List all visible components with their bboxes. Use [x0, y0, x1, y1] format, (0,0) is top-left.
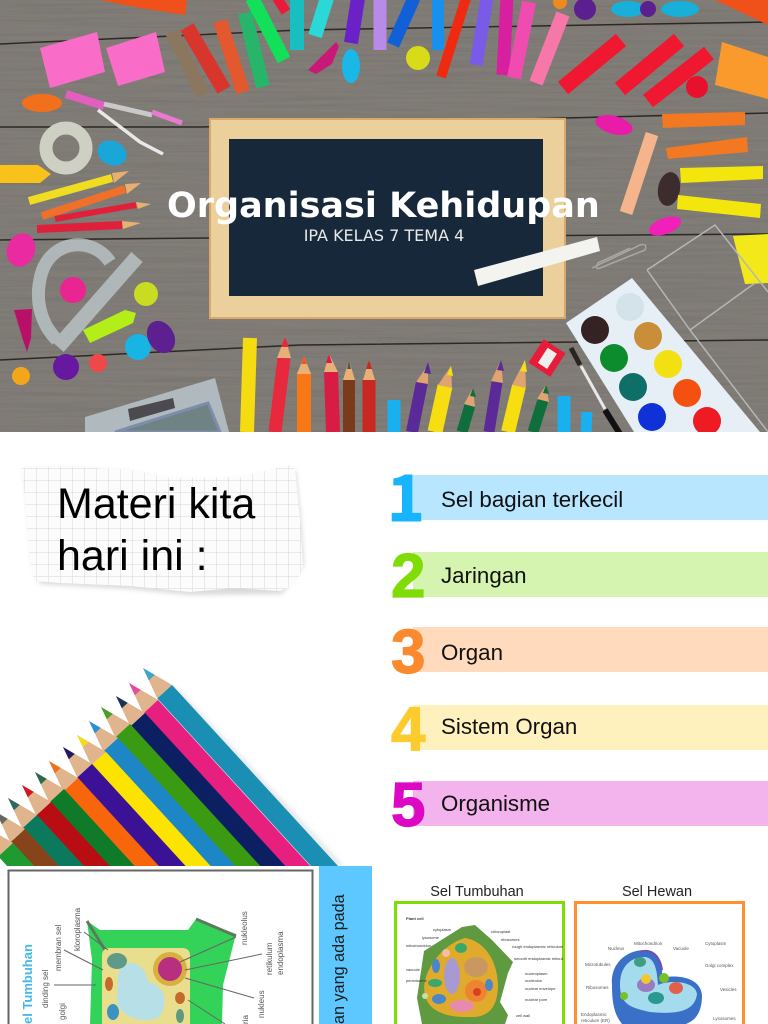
list item 2: Jaringan: [441, 563, 527, 588]
slide subtitle: IPA KELAS 7 TEMA 4: [304, 226, 464, 245]
white chalk stick: [474, 237, 600, 286]
heading: materi kita: hari ini :: [57, 532, 208, 580]
blue egg bead: [98, 140, 126, 166]
tiny labels: smooth endoplasmic reticulum: [514, 956, 569, 961]
vacuole: [117, 963, 165, 1020]
tiny labels: nuclear pore: [525, 997, 548, 1002]
green cell wall: [87, 919, 236, 1024]
pencil shadow: [175, 690, 340, 866]
top supplies: chalk row: [100, 0, 709, 101]
list item 5: 5: [391, 771, 425, 840]
list item 1: Sel bagian terkecil: [441, 487, 623, 512]
tiny labels: Vesicles: [720, 987, 737, 992]
tiny labels: Endoplasmic: [581, 1012, 608, 1017]
tiny labels: lysosome: [422, 935, 440, 940]
chloroplast: [107, 953, 127, 969]
tiny labels: [581, 941, 737, 1023]
red sharpener: [528, 339, 566, 377]
labels: ria: [241, 1015, 250, 1024]
cytoplasm: [424, 938, 498, 1017]
labels: endoplasma: [276, 931, 285, 975]
purple rim: [640, 951, 662, 970]
panel: rotated plant cell diagram: [8, 870, 312, 1024]
tiny labels: Plant cell: [406, 916, 424, 921]
label: sel tumbuhan: Sel Tumbuhan: [430, 884, 524, 900]
labels: nukleus: [257, 990, 266, 1018]
paper clips: [592, 245, 646, 268]
tiny labels: Mitochondrion: [634, 941, 663, 946]
nucleus: [153, 952, 187, 986]
cell interior: [620, 957, 697, 1013]
labels: kloroplasma: [73, 907, 82, 951]
mitochondria: [175, 992, 185, 1004]
labels: membran sel: [54, 925, 63, 971]
torn paper note: [22, 465, 304, 595]
tiny labels: Lysosomes: [713, 1016, 736, 1021]
tiny labels: chloroplast: [491, 929, 511, 934]
paintbrush: [571, 348, 620, 434]
slide 1: school supplies photo background: [0, 0, 768, 435]
label: sel tumbuhan: el Tumbuhan: [20, 944, 35, 1024]
clear plastic case and yellow note: [647, 225, 768, 432]
paint palette: [566, 278, 760, 435]
labels: golgi: [58, 1003, 67, 1020]
tiny labels: nucleolus: [525, 978, 542, 983]
label: sel hewan: Sel Hewan: [622, 884, 692, 900]
tiny labels: nucleoplasm: [525, 971, 548, 976]
tiny labels: [406, 916, 569, 1018]
list item 1: [387, 448, 768, 540]
tape roll: [46, 128, 86, 168]
heading: materi kita: Materi kita: [57, 480, 255, 528]
calculator: [85, 378, 229, 432]
tiny labels: peroxisome: [406, 978, 427, 983]
slide 2: materials background: [0, 432, 768, 866]
list item 5: Organisme: [441, 791, 550, 816]
wall edge shading: [87, 919, 236, 950]
leader lines: [54, 932, 262, 1024]
vacuole: [444, 958, 460, 994]
bottom pencils: [247, 337, 587, 432]
tiny labels: Microtubules: [585, 962, 611, 967]
labels: [41, 907, 285, 1024]
labels: dinding sel: [41, 970, 50, 1008]
list item 4: Sistem Organ: [441, 714, 577, 739]
orange sticky note: [715, 42, 768, 99]
list item 1: 1: [387, 448, 425, 540]
slide title: Organisasi Kehidupan: [167, 186, 600, 226]
wood table background: [0, 0, 768, 432]
list item 3: [391, 618, 768, 687]
labels: nukleolus: [240, 911, 249, 945]
tiny labels: Vacuole: [673, 946, 689, 951]
nucleus: [637, 978, 655, 992]
panel: blue rotated text bar: [319, 866, 372, 1024]
beads left: [2, 229, 181, 385]
slide 3: white background: [0, 866, 768, 1024]
tiny labels: Nucleus: [608, 946, 625, 951]
tiny labels: Ribosomes: [586, 985, 609, 990]
tiny labels: Cytoplasm: [705, 941, 727, 946]
tiny labels: rough endoplasmic reticulum: [512, 944, 564, 949]
panel: animal cell diagram: [576, 902, 744, 1024]
animal cell body: [612, 950, 702, 1024]
compass: [66, 94, 182, 154]
golgi: [107, 1004, 119, 1020]
tiny labels: cell wall: [516, 1013, 530, 1018]
list item 4: 4: [391, 695, 426, 764]
protractor: [38, 245, 137, 347]
tiny labels: nuclear envelope: [525, 986, 556, 991]
coloured pencils left: [29, 171, 151, 229]
beads top row: [22, 0, 768, 112]
tiny labels: vacuole: [406, 967, 421, 972]
coloured pencils photo: [0, 668, 342, 866]
labels: retikulum: [265, 942, 274, 975]
list item 5: [391, 771, 768, 840]
list item 3: 3: [391, 618, 425, 687]
tiny labels: reticulum (ER): [581, 1018, 610, 1023]
organelles: [442, 949, 450, 957]
tiny labels: ribosomes: [501, 937, 519, 942]
tiny labels: mitochondrion: [406, 943, 431, 948]
yellow sticky arrow: [0, 165, 51, 183]
right chalks: [593, 111, 763, 239]
list item 4: [391, 695, 768, 764]
cytoplasm: [102, 948, 190, 1024]
pink sticky notes: [40, 32, 165, 88]
tiny labels: cytoplasm: [433, 927, 452, 932]
panel: blue rotated text bar: an yang ada pada: [330, 894, 348, 1024]
plant cell body: [417, 925, 513, 1024]
list item 3: Organ: [441, 640, 503, 665]
tiny labels: Golgi complex: [705, 963, 734, 968]
list item 2: [391, 542, 768, 611]
panel: plant cell diagram: [396, 902, 569, 1024]
blackboard: [210, 119, 565, 318]
list item 2: 2: [391, 542, 425, 611]
organelles: [659, 973, 669, 983]
